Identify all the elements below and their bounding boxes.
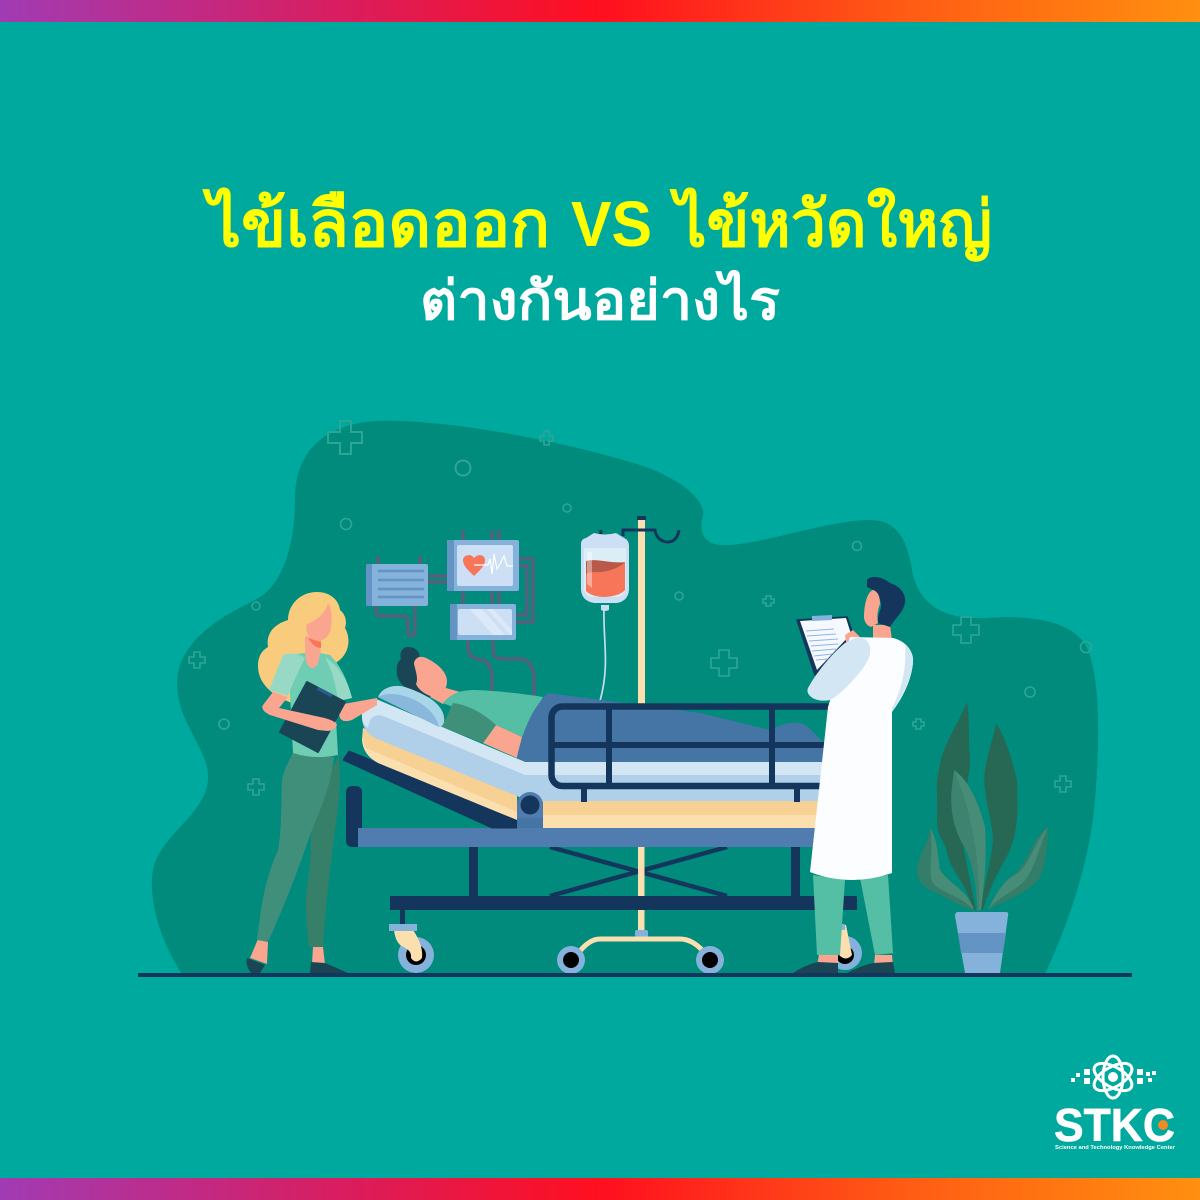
logo dot [1158, 1120, 1168, 1130]
monitor cables [376, 530, 534, 697]
pole lower [638, 847, 644, 931]
right caster [828, 936, 862, 970]
neckline [305, 652, 320, 668]
base crossbars [550, 847, 727, 896]
dark leaf left [937, 702, 976, 910]
right leaf [988, 827, 1048, 910]
raised blue cushion [362, 700, 560, 802]
patient [397, 647, 543, 758]
pot [955, 912, 1008, 973]
neck [305, 636, 321, 664]
title: ต่างกันอย่างไร [420, 269, 780, 331]
hair [258, 592, 348, 703]
clipboard [797, 617, 853, 675]
raised cream layers [362, 728, 517, 820]
clipboard lines [806, 629, 838, 660]
hair [867, 577, 905, 627]
pillow [378, 686, 444, 727]
pole base arc [580, 939, 703, 951]
foot post [346, 786, 362, 847]
dark pant leg [306, 755, 340, 947]
hand [845, 630, 860, 645]
left caster [400, 909, 405, 925]
hinge [517, 792, 543, 828]
raised light strip [362, 699, 560, 775]
IV blood bag [581, 533, 629, 611]
clipboard [280, 682, 345, 752]
left leaf [917, 828, 974, 910]
bottom gradient bar [0, 1178, 1200, 1200]
coat [810, 637, 913, 880]
shirt [288, 653, 352, 757]
shoes [246, 958, 265, 973]
neck [873, 625, 892, 640]
shirt [443, 690, 543, 737]
left monitor unit [366, 564, 428, 606]
logo atom icon [1090, 1056, 1136, 1098]
decorative plus signs and circles [189, 421, 1092, 795]
lower monitor unit [450, 604, 516, 640]
dark leaf right [980, 723, 1017, 910]
logo pixels [1071, 1069, 1156, 1084]
IV pole upper [601, 516, 679, 704]
ankles [817, 955, 893, 965]
coat back shadow [892, 645, 913, 712]
hair [397, 647, 430, 697]
face [864, 590, 880, 627]
background blob [152, 421, 1098, 974]
left arm [262, 692, 337, 731]
right arm [338, 698, 377, 721]
clipboard clip [812, 615, 832, 621]
logo tagline: Science and Technology Knowledge Center [1055, 1145, 1176, 1151]
title [202, 187, 992, 331]
pants [813, 875, 845, 955]
doctor [793, 577, 913, 973]
sleeves [269, 654, 305, 696]
face [306, 603, 332, 641]
face [414, 657, 447, 697]
blanket [517, 693, 826, 764]
nurse [246, 592, 377, 973]
legs [250, 939, 268, 964]
heart icon [463, 555, 485, 576]
light pant leg [257, 753, 334, 942]
main blue bar [358, 828, 820, 847]
sleeve [807, 638, 870, 701]
arm [483, 725, 522, 758]
centre leaf [951, 770, 986, 910]
plant [917, 702, 1048, 973]
title: ไข้เลือดออก [202, 187, 550, 260]
shoes [793, 962, 838, 973]
bed mattress [343, 699, 825, 828]
top gradient bar [0, 0, 1200, 22]
logo wordmark: STKC [1054, 1099, 1175, 1151]
neck [430, 688, 460, 704]
floor line [138, 973, 1132, 977]
bed lower frame [346, 786, 862, 974]
logo [1054, 1056, 1176, 1151]
heart rate monitor [447, 540, 519, 591]
IV tube [600, 610, 605, 701]
sleeve [442, 703, 496, 743]
base wheels [557, 946, 585, 974]
headrest frame [343, 751, 517, 828]
title: VS [571, 188, 652, 260]
title: ไข้หวัดใหญ่ [669, 187, 992, 261]
bed side rail [551, 706, 836, 786]
